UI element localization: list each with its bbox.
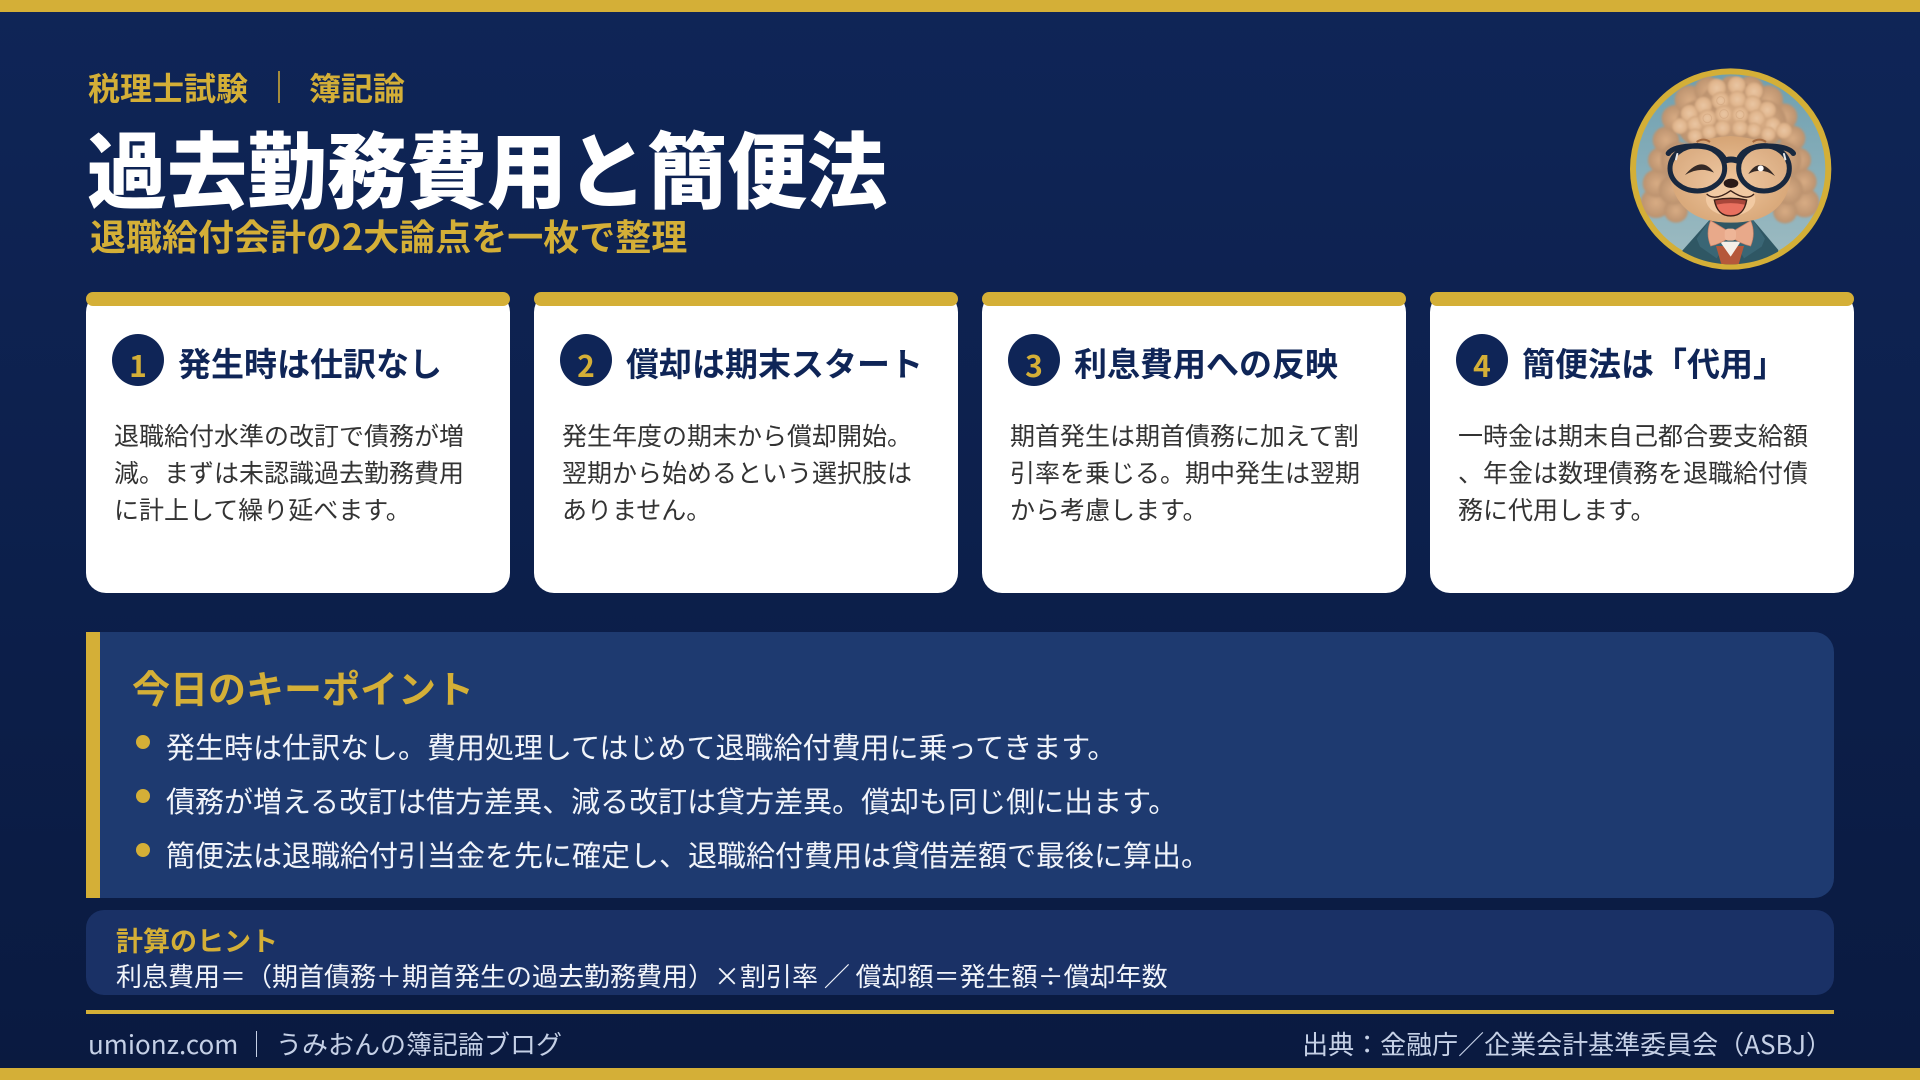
card 2 body: 翌期から始めるという選択肢は	[562, 454, 912, 490]
card 4 body: 、年金は数理債務を退職給付債	[1458, 454, 1808, 490]
panel: card 1	[86, 292, 510, 593]
subtitle: 退職給付会計の2大論点を一枚で整理	[90, 209, 687, 261]
card 4 number badge	[1456, 334, 1508, 386]
key point 2 bullet	[136, 789, 150, 803]
header label: topic: 簿記論	[309, 64, 405, 110]
key point 1 bullet	[136, 735, 150, 749]
card 1 number badge: 1	[129, 342, 147, 386]
card 1 body	[114, 417, 464, 527]
card 4 number badge: 4	[1473, 342, 1491, 386]
key points heading: 今日のキーポイント	[132, 659, 474, 714]
card 1 body: 減。まずは未認識過去勤務費用	[114, 454, 464, 490]
card 2 body: ありません。	[562, 491, 711, 527]
key point 2 text: 債務が増える改訂は借方差異、減る改訂は貸方差異。償却も同じ側に出ます。	[166, 779, 1177, 821]
hint heading: 計算のヒント	[116, 920, 278, 959]
card 4 body	[1458, 417, 1808, 527]
card 4 body: 務に代用します。	[1458, 491, 1656, 527]
card 2 heading: 償却は期末スタート	[626, 338, 923, 386]
card 3 heading: 利息費用への反映	[1074, 338, 1338, 386]
panel: card 4	[1430, 292, 1854, 593]
footer divider	[256, 1031, 257, 1057]
card 1 accent bar	[86, 292, 510, 306]
card 3 number badge: 3	[1025, 342, 1043, 386]
card 3 accent bar	[982, 292, 1406, 306]
icon: poodle mascot avatar	[1630, 68, 1832, 270]
card 4 accent bar	[1430, 292, 1854, 306]
card 3 number badge	[1008, 334, 1060, 386]
card 4 heading: 簡便法は「代用」	[1522, 338, 1786, 386]
title: 過去勤務費用と簡便法	[87, 106, 887, 226]
card 2 body: 発生年度の期末から償却開始。	[562, 417, 912, 453]
key point 1 text: 発生時は仕訳なし。費用処理してはじめて退職給付費用に乗ってきます。	[166, 725, 1116, 767]
footer rule	[86, 1010, 1834, 1014]
card 1 number badge	[112, 334, 164, 386]
card 3 body: から考慮します。	[1010, 491, 1208, 527]
panel: card 2	[534, 292, 958, 593]
top gold bar	[0, 0, 1920, 12]
bottom gold bar	[0, 1068, 1920, 1080]
footer site url: umionz.com	[88, 1025, 238, 1062]
card 4 body: 一時金は期末自己都合要支給額	[1458, 417, 1808, 453]
panel: card 3	[982, 292, 1406, 593]
key point 3 bullet	[136, 843, 150, 857]
card 1 body: 退職給付水準の改訂で債務が増	[114, 417, 464, 453]
header label: divider	[278, 71, 280, 103]
footer blog name: うみおんの簿記論ブログ	[276, 1025, 562, 1062]
card 1 body: に計上して繰り延べます。	[114, 491, 411, 527]
card 2 number badge	[560, 334, 612, 386]
footer source: 出典：金融庁／企業会計基準委員会（ASBJ）	[1302, 1025, 1832, 1062]
card 3 body	[1010, 417, 1360, 527]
card 3 body: 期首発生は期首債務に加えて割	[1010, 417, 1359, 453]
card 1 heading: 発生時は仕訳なし	[178, 338, 442, 386]
card 2 number badge: 2	[577, 342, 595, 386]
key point 3 text: 簡便法は退職給付引当金を先に確定し、退職給付費用は貸借差額で最後に算出。	[166, 833, 1210, 875]
panel: key points	[86, 632, 1834, 898]
card 2 accent bar	[534, 292, 958, 306]
card 2 body	[562, 417, 912, 527]
header label: subject: 税理士試験	[88, 64, 248, 110]
panel: calculation hint	[86, 910, 1834, 995]
hint formula: 利息費用＝（期首債務＋期首発生の過去勤務費用）×割引率 ／ 償却額＝発生額÷償却年数	[116, 957, 1168, 994]
card 3 body: 引率を乗じる。期中発生は翌期	[1010, 454, 1360, 490]
